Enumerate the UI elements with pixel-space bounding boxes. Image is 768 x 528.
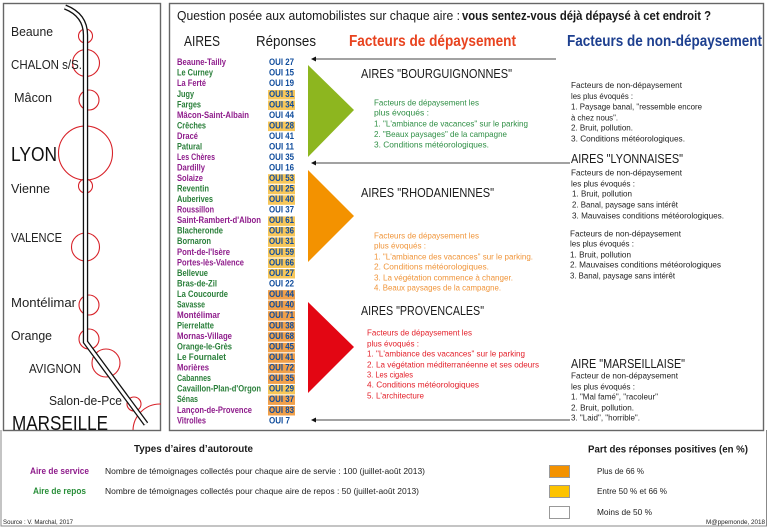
text: rhodaniennes non-factors: 2. Mauvaises conditions météorologiques (570, 260, 721, 270)
list: aires: Dardilly (177, 162, 206, 172)
list: aires: Le Fournalet (177, 352, 226, 362)
text: rhodaniennes factors: 1. "L'ambiance des vacances" sur le parking. (374, 252, 533, 262)
text: provencales factors: 1. "L'ambiance des vacances" sur le parking (367, 348, 525, 358)
title: Question posée aux automobilistes sur chaque aire : (177, 8, 460, 23)
text: bourguignonnes factors: 3. Conditions météorologiques. (374, 140, 489, 150)
text: provencales factors: 4. Conditions météorologiques (367, 380, 479, 390)
outer frame (1, 430, 766, 526)
text: rhodaniennes non-factors: les plus évoqués : (570, 238, 634, 248)
column heading: facteurs de dépaysement: Facteurs de dépaysement (349, 33, 517, 50)
list: réponses: OUI 15 (269, 68, 294, 78)
list: réponses (269, 57, 295, 425)
text: bourguignonnes non-factors (571, 80, 702, 144)
city labels (11, 24, 122, 435)
list: aires: Farges (177, 99, 201, 109)
text: bourguignonnes factors: 1. "L'ambiance de vacances" sur le parking (374, 118, 528, 128)
list: réponses: OUI 41 (269, 131, 294, 141)
legend: part des réponses positives (550, 444, 748, 518)
text: lyonnaises non-factors: 3. Mauvaises conditions météorologiques. (572, 210, 724, 220)
list: aires: Roussillon (177, 205, 214, 215)
text: bourguignonnes non-factors: Facteurs de non-dépaysement (571, 80, 683, 90)
text: rhodaniennes factors (374, 230, 533, 292)
list: réponses: OUI 41 (269, 352, 294, 362)
list: réponses: OUI 40 (269, 194, 294, 204)
text: rhodaniennes factors: 2. Conditions météorologiques. (374, 262, 489, 272)
list: réponses: OUI 83 (269, 405, 294, 415)
list: réponses: OUI 31 (269, 236, 294, 246)
list: réponses: OUI 19 (269, 78, 294, 88)
text: rhodaniennes factors: Facteurs de dépaysement les (374, 230, 479, 240)
list: aires: Mâcon-Saint-Albain (177, 110, 249, 120)
city labels: Montélimar (11, 295, 77, 310)
city labels: Orange (11, 328, 52, 343)
text: marseillaise non-factors: 3. "Laid", "horrible". (571, 412, 640, 422)
list: aires: Lançon-de-Provence (177, 405, 252, 415)
legend: types d'aires: Aire de repos (33, 486, 86, 496)
list: aires: Montélimar (177, 310, 220, 320)
city circles (58, 28, 161, 430)
list: aires: Vitrolles (177, 415, 206, 425)
list: aires: Dracé (177, 131, 198, 141)
text: bourguignonnes factors: 2. "Beaux paysages" de la campagne (374, 129, 507, 139)
list: réponses: OUI 31 (269, 89, 294, 99)
list: réponses: OUI 34 (269, 99, 295, 109)
text: marseillaise non-factors (571, 370, 679, 422)
text: rhodaniennes factors: 4. Beaux paysages de la campagne. (374, 282, 501, 292)
panel: highway map (2, 2, 162, 432)
list: réponses: OUI 44 (269, 289, 295, 299)
text: marseillaise non-factors: les plus évoqués : (571, 382, 635, 392)
text: rhodaniennes non-factors: 1. Bruit, pollution (570, 250, 631, 260)
legend: part des réponses positives: Plus de 66 % (597, 466, 645, 476)
column heading: aires: AIRES (184, 33, 220, 50)
text: rhodaniennes non-factors: Facteurs de non-dépaysement (570, 228, 682, 238)
list: réponses: OUI 38 (269, 320, 294, 330)
city labels: Salon-de-Pce (49, 393, 122, 408)
legend: types d'aires: Types d’aires d’autoroute (134, 444, 253, 455)
list: aires: Orange-le-Grès (177, 342, 232, 352)
list: réponses: OUI 27 (269, 57, 294, 67)
heading: marseillaise: AIRE "MARSEILLAISE" (571, 357, 685, 371)
text: lyonnaises non-factors: 2. Banal, paysage sans intérêt (572, 200, 679, 210)
list: aires (177, 57, 261, 425)
list: aires: Cavaillon-Plan-d'Orgon (177, 384, 261, 394)
list: aires: Beaune-Tailly (177, 57, 227, 67)
city labels: Vienne (11, 181, 50, 196)
text: provencales factors: 2. La végétation méditerranéenne et ses odeurs (367, 360, 539, 370)
legend: part des réponses positives: Moins de 50 % (597, 507, 653, 517)
text: marseillaise non-factors: 2. Bruit, pollution. (571, 402, 634, 412)
text: rhodaniennes non-factors: 3. Banal, paysage sans intérêt (570, 270, 676, 280)
list: aires: Les Chères (177, 152, 215, 162)
list: réponses: OUI 59 (269, 247, 294, 257)
list: aires: La Ferté (177, 78, 206, 88)
legend: types d'aires: Aire de service (30, 466, 89, 476)
text: lyonnaises non-factors: les plus évoqués : (571, 178, 635, 188)
text: provencales factors (367, 328, 539, 400)
title: vous sentez-vous déjà dépaysé à cet endroit ? (462, 8, 711, 23)
credit: M@ppemonde, 2018 (706, 519, 765, 526)
list: réponses: OUI 44 (269, 110, 295, 120)
text: bourguignonnes non-factors: 2. Bruit, pollution. (571, 122, 633, 132)
list: aires: Sénas (177, 394, 198, 404)
city labels: Beaune (11, 24, 53, 39)
list: réponses: OUI 35 (269, 373, 294, 383)
city labels: MARSEILLE (12, 413, 108, 435)
legend: types d'aires (30, 444, 425, 496)
list: réponses: OUI 45 (269, 342, 294, 352)
city labels: CHALON s/S. (11, 57, 82, 72)
list: aires: Morières (177, 363, 209, 373)
heading: provencales: AIRES "PROVENCALES" (361, 304, 484, 318)
list: aires: Pont-de-l'Isère (177, 247, 230, 257)
text: provencales factors: plus évoqués : (367, 338, 419, 348)
list: réponses: OUI 35 (269, 152, 294, 162)
list: aires: Bras-de-Zil (177, 278, 217, 288)
text: rhodaniennes non-factors (570, 228, 721, 280)
text: provencales factors: 3. Les cigales (367, 370, 413, 380)
text: bourguignonnes non-factors: à chez nous". (571, 112, 618, 122)
column heading: réponses: Réponses (256, 33, 316, 50)
list: réponses: OUI 68 (269, 331, 294, 341)
text: provencales factors: Facteurs de dépaysement les (367, 328, 472, 338)
list: réponses: OUI 28 (269, 120, 294, 130)
text: bourguignonnes non-factors: les plus évoqués : (571, 91, 633, 101)
list: aires: Blacheronde (177, 226, 223, 236)
text: marseillaise non-factors: 1. "Mal famé", "racoleur" (571, 392, 658, 402)
list: aires: Crêches (177, 120, 206, 130)
heading: lyonnaises: AIRES "LYONNAISES" (571, 152, 683, 166)
city labels: Mâcon (14, 90, 52, 105)
list: réponses: OUI 72 (269, 363, 294, 373)
list: réponses: OUI 29 (269, 384, 294, 394)
list: réponses: OUI 40 (269, 299, 294, 309)
text: bourguignonnes factors: plus évoqués : (374, 108, 429, 118)
list: réponses: OUI 11 (269, 141, 294, 151)
triangle: rhodaniennes (308, 170, 354, 262)
list: aires: Auberives (177, 194, 213, 204)
list: aires: Bornaron (177, 236, 211, 246)
list: réponses: OUI 22 (269, 278, 294, 288)
legend: part des réponses positives: Entre 50 % et 66 % (597, 486, 668, 496)
list: aires: Savasse (177, 299, 205, 309)
text: rhodaniennes factors: 3. La végétation commence à changer. (374, 272, 513, 282)
list: aires: Jugy (177, 89, 195, 99)
list: réponses: OUI 66 (269, 257, 294, 267)
arrow: top (311, 56, 556, 62)
heading: bourguignonnes: AIRES "BOURGUIGNONNES" (361, 67, 512, 81)
city labels: AVIGNON (29, 361, 81, 376)
triangle: provencales (308, 302, 354, 393)
list: aires: Saint-Rambert-d'Albon (177, 215, 261, 225)
list: réponses: OUI 27 (269, 268, 294, 278)
text: provencales factors: 5. L'architecture (367, 390, 424, 400)
list: aires: La Coucourde (177, 289, 228, 299)
list: réponses: OUI 37 (269, 205, 294, 215)
list: aires: Patural (177, 141, 202, 151)
text: rhodaniennes factors: plus évoqués : (374, 240, 426, 250)
list: aires: Pierrelatte (177, 320, 214, 330)
source: Source : V. Marchal, 2017 (3, 519, 73, 526)
heading: rhodaniennes: AIRES "RHODANIENNES" (361, 186, 494, 200)
text: bourguignonnes non-factors: 1. Paysage banal, "ressemble encore (571, 102, 702, 112)
list: réponses: OUI 53 (269, 173, 294, 183)
list: aires: Mornas-Village (177, 331, 232, 341)
list: aires: Solaize (177, 173, 203, 183)
list: réponses: OUI 61 (269, 215, 294, 225)
list: réponses: OUI 7 (269, 415, 290, 425)
text: lyonnaises non-factors: Facteurs de non-dépaysement (571, 168, 683, 178)
list: aires: Reventin (177, 184, 209, 194)
legend: part des réponses positives: Part des réponses positives (en %) (588, 444, 748, 456)
city labels: LYON (11, 144, 57, 166)
legend: types d'aires: Nombre de témoignages collectés pour chaque aire de repos : 50 (juillet-août 2013) (105, 486, 419, 496)
arrow: bottom (311, 418, 570, 422)
list: réponses: OUI 36 (269, 226, 294, 236)
text: bourguignonnes factors: Facteurs de dépaysement les (374, 98, 479, 108)
text: bourguignonnes non-factors: 3. Conditions météorologiques. (571, 134, 685, 144)
text: lyonnaises non-factors (571, 168, 724, 220)
arrow: middle (311, 160, 570, 166)
list: aires: Bellevue (177, 268, 208, 278)
list: réponses: OUI 25 (269, 184, 294, 194)
triangle: bourguignonnes (308, 65, 354, 157)
text: lyonnaises non-factors: 1. Bruit, pollution (572, 188, 632, 198)
panel: main (170, 4, 764, 430)
motorway line (65, 7, 146, 424)
text: marseillaise non-factors: Facteur de non-dépaysement (571, 370, 679, 380)
list: aires: Le Curney (177, 68, 214, 78)
legend: types d'aires: Nombre de témoignages collectés pour chaque aire de servie : 100 (juillet-août 2013) (105, 466, 425, 476)
city labels: VALENCE (11, 230, 62, 245)
list: réponses: OUI 16 (269, 162, 294, 172)
list: aires: Portes-lès-Valence (177, 257, 244, 267)
list: aires: Cabannes (177, 373, 211, 383)
text: bourguignonnes factors (374, 98, 528, 150)
list: réponses: OUI 71 (269, 310, 294, 320)
list: réponses: OUI 37 (269, 394, 294, 404)
response highlights (268, 90, 295, 416)
